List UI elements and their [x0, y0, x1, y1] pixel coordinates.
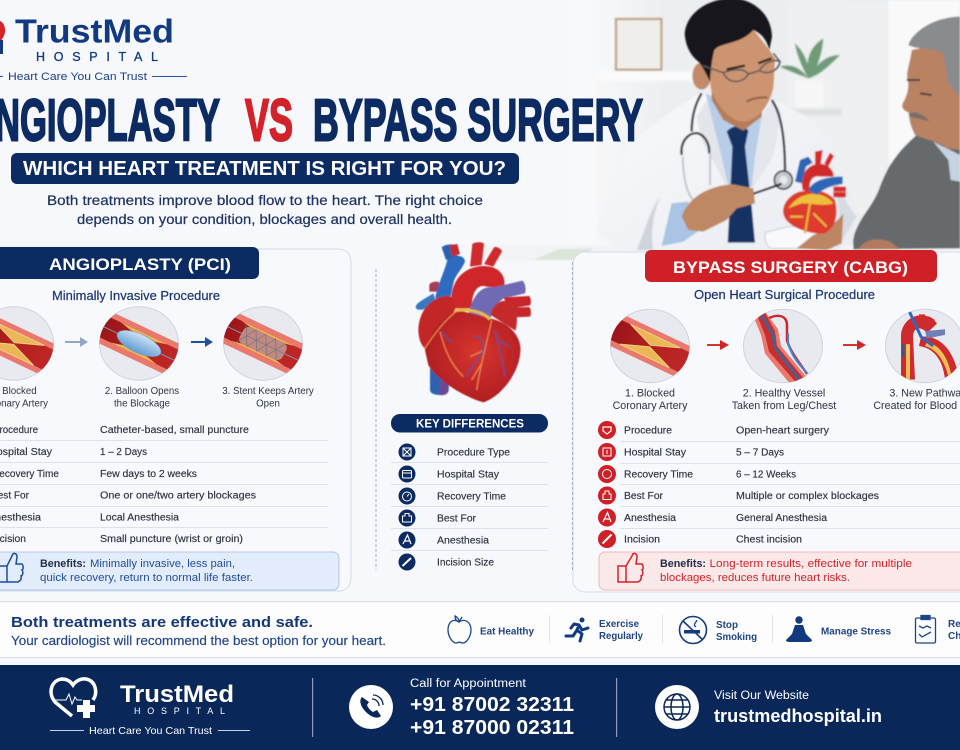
reassurance text: Both treatments are effective and safe. [11, 614, 313, 631]
habit: exercise regularly: Regularly [599, 631, 643, 642]
step 1 illustration: blocked artery [0, 306, 54, 381]
footer brand name: Heart Care You Can Trust [89, 725, 212, 737]
benefits callout [599, 552, 960, 590]
comparison table: Best For [624, 491, 664, 502]
benefits callout: Minimally invasive, less pain, [90, 558, 235, 570]
comparison table [598, 421, 960, 548]
icon row: best for [598, 486, 616, 504]
step captions: 3. Stent Keeps Artery [222, 386, 314, 397]
title: Angioplasty vs Bypass Surgery: VS [245, 88, 293, 154]
benefits callout: blockages, reduces future heart risks. [660, 572, 850, 584]
benefits callout: Long-term results, effective for multiple [710, 558, 912, 570]
comparison table: Small puncture (wrist or groin) [100, 534, 243, 545]
step captions: 2. Balloon Opens [105, 386, 179, 397]
step 1 illustration: blocked artery [610, 308, 690, 384]
plant [780, 38, 840, 78]
logo: TrustMed Hospital: TrustMed [15, 12, 174, 50]
logo: TrustMed Hospital: Heart Care You Can Trust [8, 71, 147, 83]
comparison table: Anesthesia [624, 513, 676, 524]
benefits callout: Benefits: [40, 558, 86, 570]
icon: clipboard [916, 616, 936, 643]
step captions: Taken from Leg/Chest [732, 400, 836, 412]
panel: angioplasty [0, 247, 351, 591]
icon: thumbs up [0, 553, 23, 582]
icon: thumbs up [618, 553, 643, 582]
footer [0, 665, 960, 750]
comparison table: Few days to 2 weeks [100, 469, 197, 480]
comparison table: Procedure [624, 426, 672, 436]
contact: website [714, 690, 882, 726]
icon: apple [448, 616, 471, 643]
comparison table: 5 – 7 Days [736, 448, 784, 458]
icon row: best for [398, 510, 416, 526]
title: Angioplasty vs Bypass Surgery [0, 88, 643, 154]
habit: exercise regularly [599, 619, 643, 642]
arrow: step 2 to 3 [191, 337, 213, 347]
key differences list: Recovery Time [437, 492, 506, 502]
bottom strip: reassurance and healthy habits [0, 601, 960, 658]
procedure subtitle: Open Heart Surgical Procedure [694, 288, 875, 302]
habit: eat healthy: Eat Healthy [480, 626, 534, 638]
icon row: incision [598, 530, 616, 548]
heart illustration [416, 242, 531, 402]
stethoscope [681, 93, 785, 200]
icon: red heart mark [0, 20, 5, 44]
logo: TrustMed Hospital: HOSPITAL [36, 50, 158, 64]
key differences list: Procedure Type [437, 448, 510, 458]
icon row: procedure type [398, 444, 416, 460]
habit: stop smoking: Stop [716, 620, 738, 631]
step 2 illustration: healthy vessel graft [744, 309, 822, 385]
icon: no smoking [680, 616, 706, 644]
contact: phone numbers: +91 87002 32311 [410, 694, 574, 716]
key differences list: Anesthesia [437, 536, 489, 546]
panel: bypass surgery [572, 250, 960, 592]
contact: phone numbers: +91 87000 02311 [410, 717, 574, 739]
photo: doctor explaining heart model to patient [480, 0, 960, 260]
contact: phone numbers: Call for Appointment [410, 678, 527, 690]
logo: TrustMed Hospital [0, 12, 187, 83]
step 3 illustration: stent [223, 306, 303, 381]
heading: Bypass Surgery (CABG) [645, 250, 937, 282]
doctor coat [597, 93, 860, 251]
icon: meditation [786, 616, 812, 642]
habit: stop smoking: Smoking [716, 632, 757, 643]
habit: stop smoking [716, 620, 757, 643]
comparison table: Incision [624, 534, 660, 546]
eyebrows and mouth [727, 58, 772, 102]
benefits callout: Benefits: [660, 558, 706, 570]
step captions: Coronary Artery [613, 400, 688, 412]
icon: phone [349, 685, 393, 729]
frame on shelf [616, 19, 661, 70]
icon row: procedure [598, 421, 616, 439]
footer brand name: TrustMed [120, 681, 234, 708]
procedure subtitle: Minimally Invasive Procedure [52, 289, 220, 303]
intro paragraph: Both treatments improve blood flow to the heart. The right choice [47, 193, 483, 208]
key differences list: Best For [437, 514, 477, 524]
icon: runner [566, 618, 588, 641]
icon row: recovery time [598, 465, 616, 483]
comparison table: Open-heart surgery [736, 426, 829, 436]
comparison table: Catheter-based, small puncture [100, 425, 249, 436]
step 2 illustration: balloon [99, 306, 179, 381]
comparison table [0, 425, 328, 545]
benefits callout [0, 552, 339, 590]
arrow: step 1 to 2 [65, 337, 88, 347]
reassurance text: Your cardiologist will recommend the best option for your heart. [11, 634, 386, 648]
comparison table: Local Anesthesia [100, 512, 179, 524]
comparison table: 6 – 12 Weeks [736, 470, 796, 480]
comparison table: General Anesthesia [736, 513, 827, 524]
footer brand name [50, 681, 250, 737]
step captions: 2. Healthy Vessel [743, 388, 825, 400]
comparison table: Recovery Time [624, 470, 693, 480]
arrow: step 2 to 3 [843, 340, 866, 350]
contact: website: Visit Our Website [714, 690, 809, 702]
key differences heading: KEY DIFFERENCES [416, 416, 524, 430]
icon: globe [655, 685, 699, 729]
heading: Bypass Surgery (CABG): BYPASS SURGERY (CABG) [673, 258, 908, 277]
shirt and tie [706, 93, 762, 187]
heading: Angioplasty (PCI) [0, 247, 259, 279]
comparison table: Chest incision [736, 534, 802, 546]
icon row: anesthesia [598, 508, 616, 526]
habit: exercise regularly: Exercise [599, 619, 639, 630]
title: Angioplasty vs Bypass Surgery: BYPASS SURGERY [313, 88, 643, 154]
divider: left of centre column [375, 269, 377, 570]
key differences list: Hospital Stay [437, 470, 499, 480]
comparison table: One or one/two artery blockages [100, 490, 256, 502]
comparison table: Multiple or complex blockages [736, 491, 879, 502]
subtitle banner: WHICH HEART TREATMENT IS RIGHT FOR YOU? [23, 158, 506, 180]
footer brand name: HOSPITAL [134, 706, 225, 716]
icon row: hospital stay [598, 443, 616, 461]
reassurance text [11, 614, 386, 648]
habit: regular checkups [948, 619, 960, 642]
key differences list: Incision Size [437, 558, 494, 568]
heading: Angioplasty (PCI): ANGIOPLASTY (PCI) [49, 255, 231, 274]
desk [480, 245, 960, 260]
benefits callout: quick recovery, return to normal life faster. [40, 572, 253, 584]
comparison table: Hospital Stay [624, 448, 686, 458]
patient [853, 135, 960, 249]
step captions: Open [256, 398, 280, 410]
glasses [703, 53, 780, 81]
sleeve and hand [662, 202, 700, 246]
intro paragraph [47, 193, 483, 227]
step 3 illustration: new pathway [886, 309, 960, 383]
subtitle banner [11, 153, 519, 184]
key differences list [391, 444, 548, 570]
icon row: hospital stay [398, 466, 416, 482]
model heart [765, 227, 832, 248]
step captions [0, 386, 314, 410]
footer logo icon: heart with pulse and cross [51, 679, 96, 718]
habit: manage stress: Manage Stress [821, 626, 891, 638]
step captions: the Blockage [114, 398, 170, 410]
contact: website: trustmedhospital.in [714, 706, 882, 726]
step captions: 1. Blocked [625, 388, 675, 400]
contact: phone numbers [410, 678, 574, 739]
key differences heading [391, 414, 548, 432]
icon row: anesthesia [398, 532, 416, 548]
step captions [613, 388, 960, 412]
neck and head [712, 80, 763, 131]
arrow: step 1 to 2 [707, 340, 729, 350]
icon row: incision size [398, 554, 416, 570]
intro paragraph: depends on your condition, blockages and overall health. [77, 212, 452, 227]
icon row: recovery time [398, 488, 416, 504]
comparison table: 1 – 2 Days [100, 447, 147, 458]
